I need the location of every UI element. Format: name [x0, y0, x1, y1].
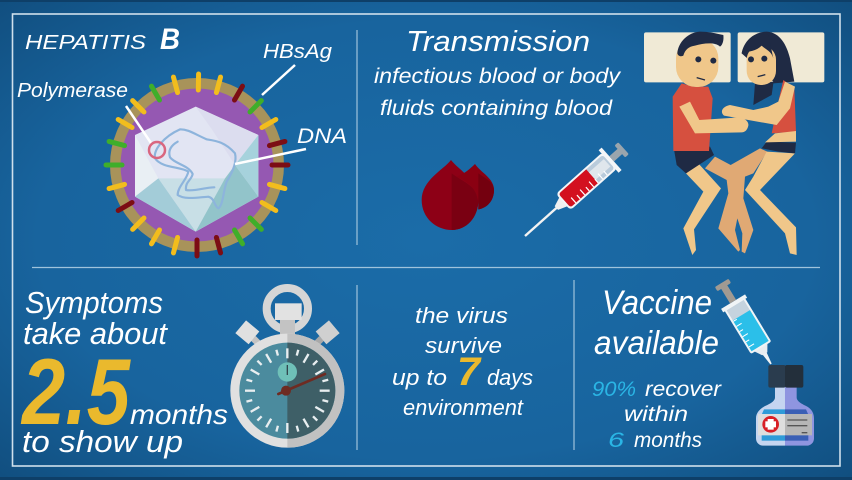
icon: vaccine syringe	[710, 276, 783, 371]
panel: hepatitis B virus	[17, 23, 347, 256]
text: symptoms take about	[23, 285, 168, 351]
text: 90% recover within 6 months: recover	[645, 378, 722, 401]
icon: blood syringe	[515, 137, 634, 247]
text: symptoms take about: Symptoms	[25, 285, 163, 320]
icon: blood drops	[422, 160, 494, 230]
number: 2.5: 2.5	[20, 339, 131, 444]
illustration: couple in bed	[644, 32, 824, 255]
panel: transmission	[374, 26, 824, 255]
text: symptoms take about: take about	[23, 316, 168, 351]
heading: vaccine available	[594, 284, 719, 361]
text: 90% recover within 6 months: months	[634, 429, 702, 452]
text: months: months	[130, 399, 228, 430]
heading: transmission: Transmission	[406, 26, 590, 58]
icon: stopwatch	[230, 288, 344, 448]
label: HBsAg	[262, 41, 332, 95]
text: the virus survive	[415, 303, 508, 358]
text: up to 7 days: days	[487, 365, 533, 390]
text: up to 7 days: 7	[457, 350, 482, 394]
label: DNA: DNA	[297, 125, 347, 148]
icon: vaccine bottle	[756, 365, 814, 446]
text: 90% recover within 6 months: 6	[608, 429, 624, 452]
text: 90% recover within 6 months: 90%	[592, 378, 636, 401]
text: environment: environment	[403, 395, 524, 420]
icon: virus particle	[106, 74, 288, 256]
text: 90% recover within 6 months	[592, 378, 722, 452]
text: the virus survive: the virus	[415, 303, 508, 328]
heading: hepatitis B: HEPATITIS	[25, 32, 147, 54]
text: up to 7 days: up to	[392, 365, 447, 390]
heading: hepatitis B	[25, 23, 180, 56]
heading: vaccine available: Vaccine	[602, 284, 712, 322]
panel: vaccine	[592, 276, 814, 452]
panel: virus survival	[392, 303, 533, 420]
label: Polymerase	[17, 80, 165, 158]
heading: vaccine available: available	[594, 324, 719, 361]
text: transmission routes: fluids containing blood	[380, 97, 613, 120]
label: Polymerase: Polymerase	[17, 80, 128, 102]
label: HBsAg: HBsAg	[263, 41, 332, 63]
text: transmission routes	[374, 65, 622, 120]
text: to show up: to show up	[22, 424, 183, 459]
text: transmission routes: infectious blood or body	[374, 65, 622, 88]
text: the virus survive: survive	[425, 333, 502, 358]
text: up to 7 days	[392, 350, 533, 394]
panel: symptoms	[20, 285, 344, 459]
label: DNA	[235, 125, 347, 164]
heading: hepatitis B: B	[160, 23, 180, 56]
text: 90% recover within 6 months: within	[624, 403, 688, 426]
